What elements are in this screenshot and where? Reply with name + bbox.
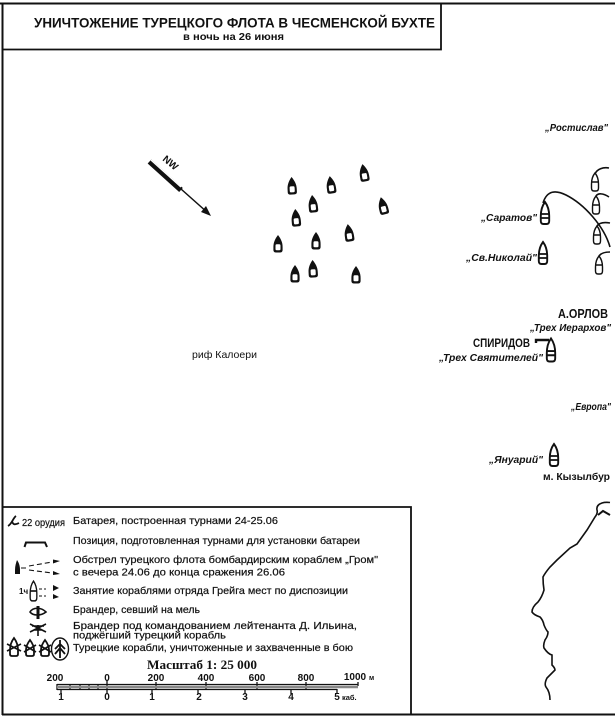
ship tracks xyxy=(543,168,610,256)
label: Saratov: „Саратов" xyxy=(480,212,538,224)
icon: bombardment by Grom xyxy=(15,560,60,575)
legend text: Greig squadron: Занятие кораблями отряда Грейга мест по диспозиции xyxy=(73,585,348,597)
ship Yanuarii xyxy=(550,444,558,466)
scale bar: 2 xyxy=(196,692,202,703)
label: Trekh Svyatitelei: „Трех Святителей" xyxy=(438,352,544,364)
scale bar: 400 xyxy=(198,673,215,684)
label: 22 guns: 22 орудия xyxy=(22,517,65,529)
legend text: Ilyin fireship: Брандер под командованием лейтенанта Д. Ильина, xyxy=(73,620,357,632)
icon: battery xyxy=(8,516,19,526)
icon: Greig squadron positions: 1ч xyxy=(19,587,28,596)
label: Trekh Ierarkhov: „Трех Иерархов" xyxy=(529,322,612,334)
scale bar: 0 xyxy=(104,673,110,684)
legend text: grounded fireship: Брандер, севший на мель xyxy=(73,604,201,616)
legend text: bombardment: Обстрел турецкого флота бомбардирским кораблем „Гром" xyxy=(73,554,378,566)
icon: Ilyin fireship xyxy=(30,624,46,636)
scale bar: 1 xyxy=(149,692,155,703)
scale bar: 5 xyxy=(334,692,340,703)
scale cable labels: 1 xyxy=(58,692,64,703)
title: УНИЧТОЖЕНИЕ ТУРЕЦКОГО ФЛОТА В ЧЕСМЕНСКОЙ БУХТЕ xyxy=(34,14,435,30)
scale bar: м xyxy=(369,675,374,682)
scale bar: 1000 xyxy=(344,672,367,683)
icon: destroyed Turkish ships xyxy=(7,638,68,660)
label: reef Kaloeri: риф Калоери xyxy=(192,349,257,361)
legend text: Turkish ships: Турецкие корабли, уничтоженные и захваченные в бою xyxy=(73,642,353,654)
scale bar: 4 xyxy=(288,692,294,703)
icon: grounded fireship xyxy=(30,606,46,619)
ship Saratov xyxy=(541,202,549,224)
wind arrow NW xyxy=(150,154,211,216)
label: Yanuarii: „Януарий" xyxy=(488,454,544,466)
scale metres labels: 200 xyxy=(47,673,64,684)
legend text: position: Позиция, подготовленная турнами для установки батареи xyxy=(73,535,360,547)
scale bar: 3 xyxy=(242,692,248,703)
legend panel: поджёгший турецкий корабль xyxy=(73,630,227,642)
scale bar: 600 xyxy=(249,673,266,684)
title box xyxy=(2,4,441,50)
scale title: Масштаб 1: 25 000 xyxy=(147,658,257,672)
scale bar: 800 xyxy=(298,673,315,684)
legend panel xyxy=(2,507,411,714)
icon: prepared position xyxy=(24,542,47,547)
line ships xyxy=(592,173,598,191)
wind arrow NW: NW xyxy=(160,154,180,173)
scale bar: каб. xyxy=(342,693,357,702)
legend panel: с вечера 24.06 до конца сражения 26.06 xyxy=(73,566,285,578)
legend text: battery: Батарея, построенная турнами 24-25.06 xyxy=(73,515,278,527)
scale bars xyxy=(57,680,358,694)
label: Cape Kyzylbur: м. Кызылбур xyxy=(543,471,610,483)
Russian fleet, upper group xyxy=(539,168,610,274)
flagship Trekh Svyatitelei xyxy=(536,338,555,362)
Turkish fleet xyxy=(273,163,390,284)
label: Sv. Nikolai: „Св.Николай" xyxy=(465,252,538,264)
icon: Greig squadron positions xyxy=(19,581,59,601)
scale bar: 200 xyxy=(148,673,165,684)
ship Sv. Nikolai xyxy=(539,242,547,264)
label: Rostislav: „Ростислав" xyxy=(544,122,609,134)
scale bar: 0 xyxy=(104,692,110,703)
label: A. Orlov: А.ОРЛОВ xyxy=(558,307,608,321)
label: Spiridov: СПИРИДОВ xyxy=(473,336,530,350)
scale bar xyxy=(47,658,374,703)
subtitle: в ночь на 26 июня xyxy=(183,31,284,43)
coastline xyxy=(532,502,610,700)
